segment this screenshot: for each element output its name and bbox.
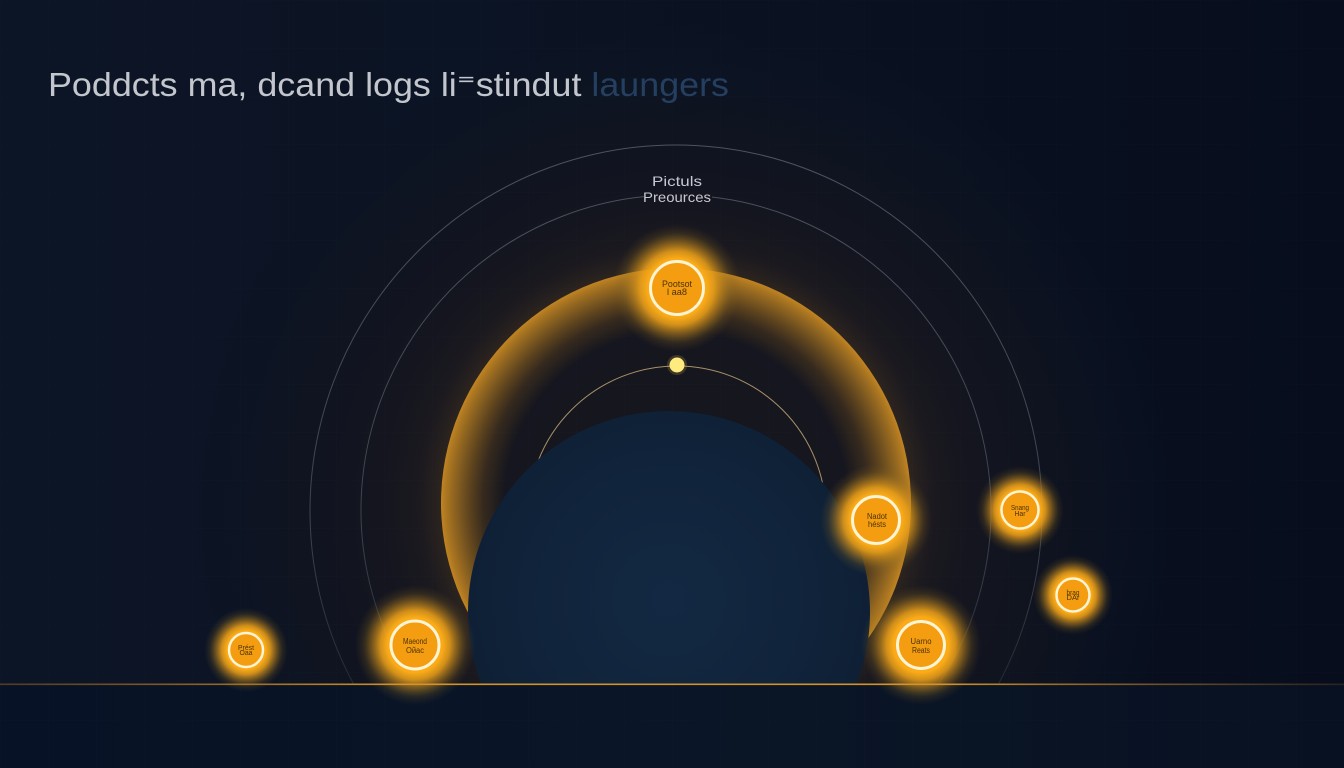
- node: bottom left: Maeond: [403, 637, 427, 646]
- node: far right lower: brag: [1066, 590, 1080, 597]
- node: far right upper: [976, 466, 1064, 554]
- node: bottom left: Ойас: [406, 646, 424, 655]
- node: right middle: hésts: [868, 520, 886, 529]
- horizon line: [0, 684, 1344, 685]
- node: far left: Prést: [238, 645, 254, 652]
- node: far right upper: Har: [1014, 511, 1026, 518]
- node: far right lower: [1033, 555, 1113, 635]
- orange glowing crescent: [441, 268, 911, 684]
- brown halo around crescent: [420, 252, 932, 684]
- node: top: Pootsot: [662, 279, 692, 289]
- node: right middle: Nadot: [867, 512, 888, 521]
- node: far right upper: Snang: [1011, 505, 1029, 512]
- node: bottom right: Uarno: [910, 637, 932, 646]
- node: bottom right: [861, 585, 981, 705]
- node: far left: Oaa: [240, 650, 253, 657]
- node: far left: [204, 608, 288, 692]
- diagram: concentric arcs: [310, 144, 1042, 684]
- second orbit ring: [361, 195, 991, 684]
- ring label: Preources: [643, 189, 711, 205]
- title: Poddcts ma, dcand logs li⁼stindut laungers: [48, 66, 729, 103]
- node: far right lower: DAr: [1066, 595, 1080, 602]
- faint band around inner arc: [504, 511, 850, 684]
- inner thin arc: [528, 366, 826, 515]
- ring label: [643, 173, 712, 205]
- ring label: Pictuls: [652, 173, 702, 189]
- node: right middle: [820, 464, 932, 576]
- central blue disc: [468, 411, 870, 684]
- node: top: [613, 224, 741, 352]
- outer orbit ring: [310, 145, 1042, 684]
- node: bottom left: [355, 585, 475, 705]
- node: top: l aa8: [667, 287, 687, 297]
- small yellow dot on inner arc: [667, 355, 687, 375]
- node: bottom right: Reats: [912, 646, 930, 655]
